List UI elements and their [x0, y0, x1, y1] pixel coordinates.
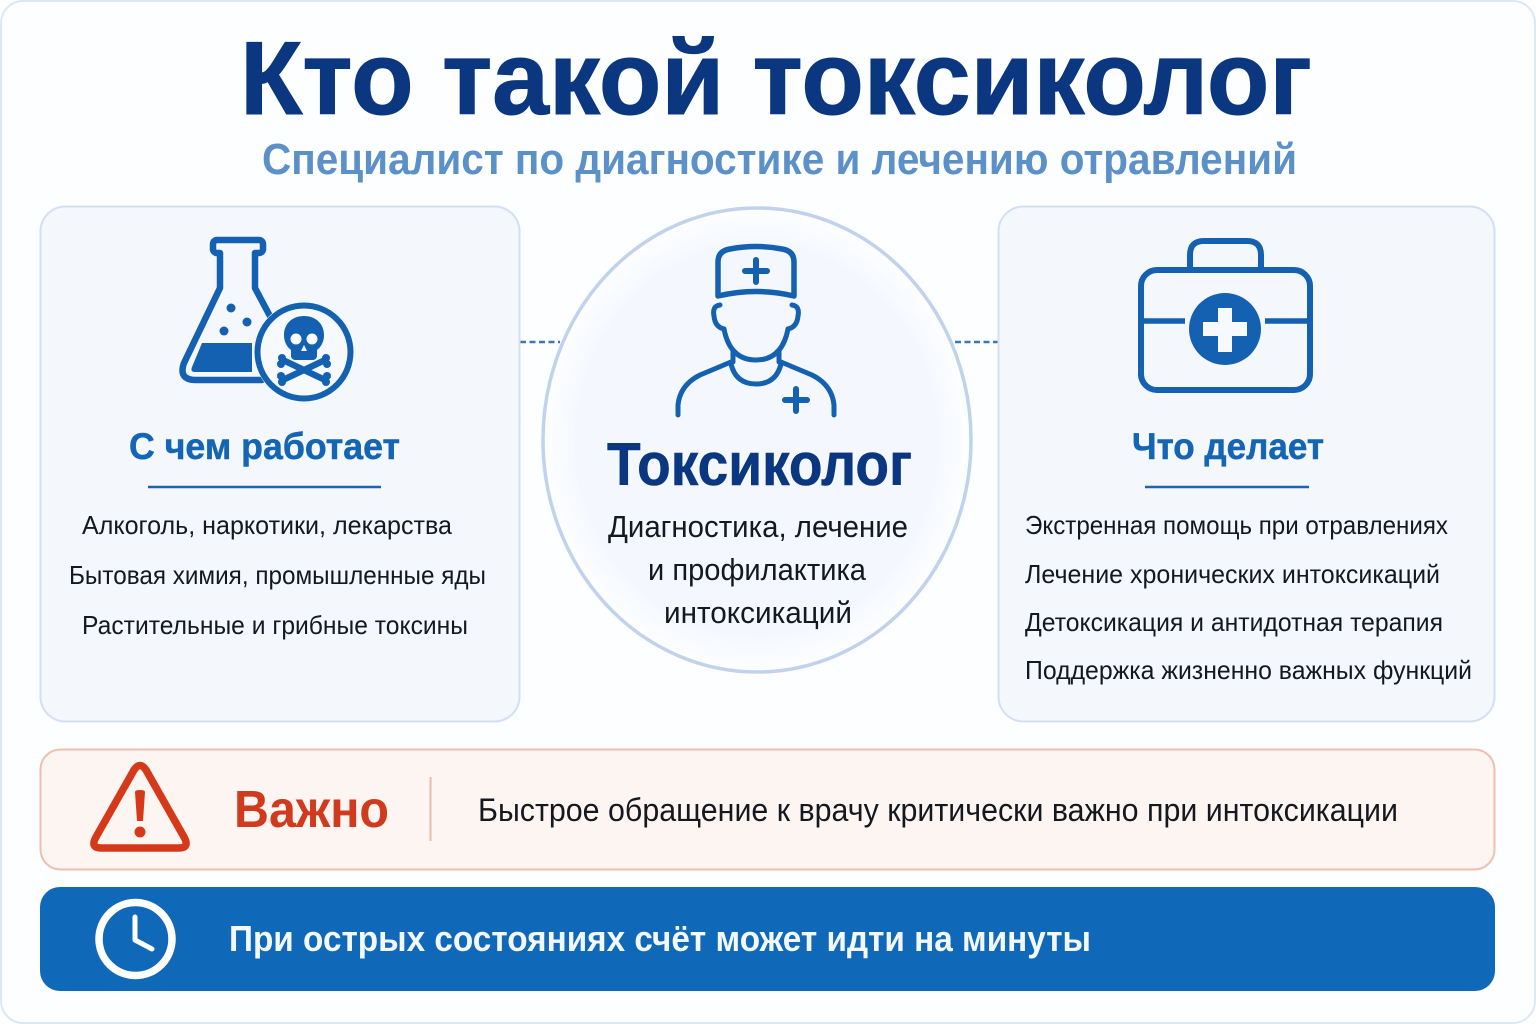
- heading: does: Что делает: [1132, 426, 1324, 467]
- icon: flask with poison sign: [182, 240, 354, 402]
- list: substances: Бытовая химия, промышленные яды: [69, 560, 486, 590]
- text: description: интоксикаций: [664, 595, 852, 630]
- icon: warning triangle: [94, 766, 186, 848]
- panel: what the toxicologist does: [998, 206, 1494, 722]
- text: description: [608, 509, 908, 630]
- panel: central circle: [543, 208, 971, 672]
- subtitle: Специалист по диагностике и лечению отравлений: [262, 135, 1297, 184]
- list: substances: [69, 510, 486, 640]
- list: actions: [1025, 510, 1472, 685]
- connector: circle to right panel: [955, 341, 998, 343]
- list: actions: Детоксикация и антидотная терапия: [1025, 607, 1443, 637]
- heading: toxicologist: Токсиколог: [607, 431, 912, 498]
- panel background: [998, 206, 1494, 722]
- heading: works with: С чем работает: [129, 426, 400, 467]
- text: description: и профилактика: [648, 552, 867, 587]
- warning background: [40, 750, 1494, 870]
- text: warning message: Быстрое обращение к врачу критически важно при интоксикации: [478, 792, 1398, 828]
- title: Кто такой токсиколог: [240, 21, 1312, 137]
- text: banner message: При острых состояниях счёт может идти на минуты: [229, 918, 1091, 959]
- list: actions: Поддержка жизненно важных функций: [1025, 655, 1472, 685]
- panel background: [40, 206, 520, 722]
- connector: left panel to circle: [520, 341, 560, 343]
- list: substances: Алкоголь, наркотики, лекарства: [82, 510, 453, 540]
- panel: important warning: [40, 750, 1494, 870]
- list: substances: Растительные и грибные токсины: [82, 610, 468, 640]
- list: actions: Экстренная помощь при отравлениях: [1025, 510, 1448, 540]
- text: description: Диагностика, лечение: [608, 509, 908, 544]
- circle background: [543, 208, 971, 672]
- banner background: [40, 887, 1495, 991]
- heading: important: Важно: [234, 781, 389, 839]
- icon: doctor: [678, 246, 834, 415]
- banner: minutes count: [40, 887, 1495, 991]
- icon: clock: [99, 902, 172, 976]
- panel: what the toxicologist works with: [40, 206, 520, 722]
- icon: first aid kit: [1141, 241, 1310, 390]
- list: actions: Лечение хронических интоксикаций: [1025, 559, 1440, 589]
